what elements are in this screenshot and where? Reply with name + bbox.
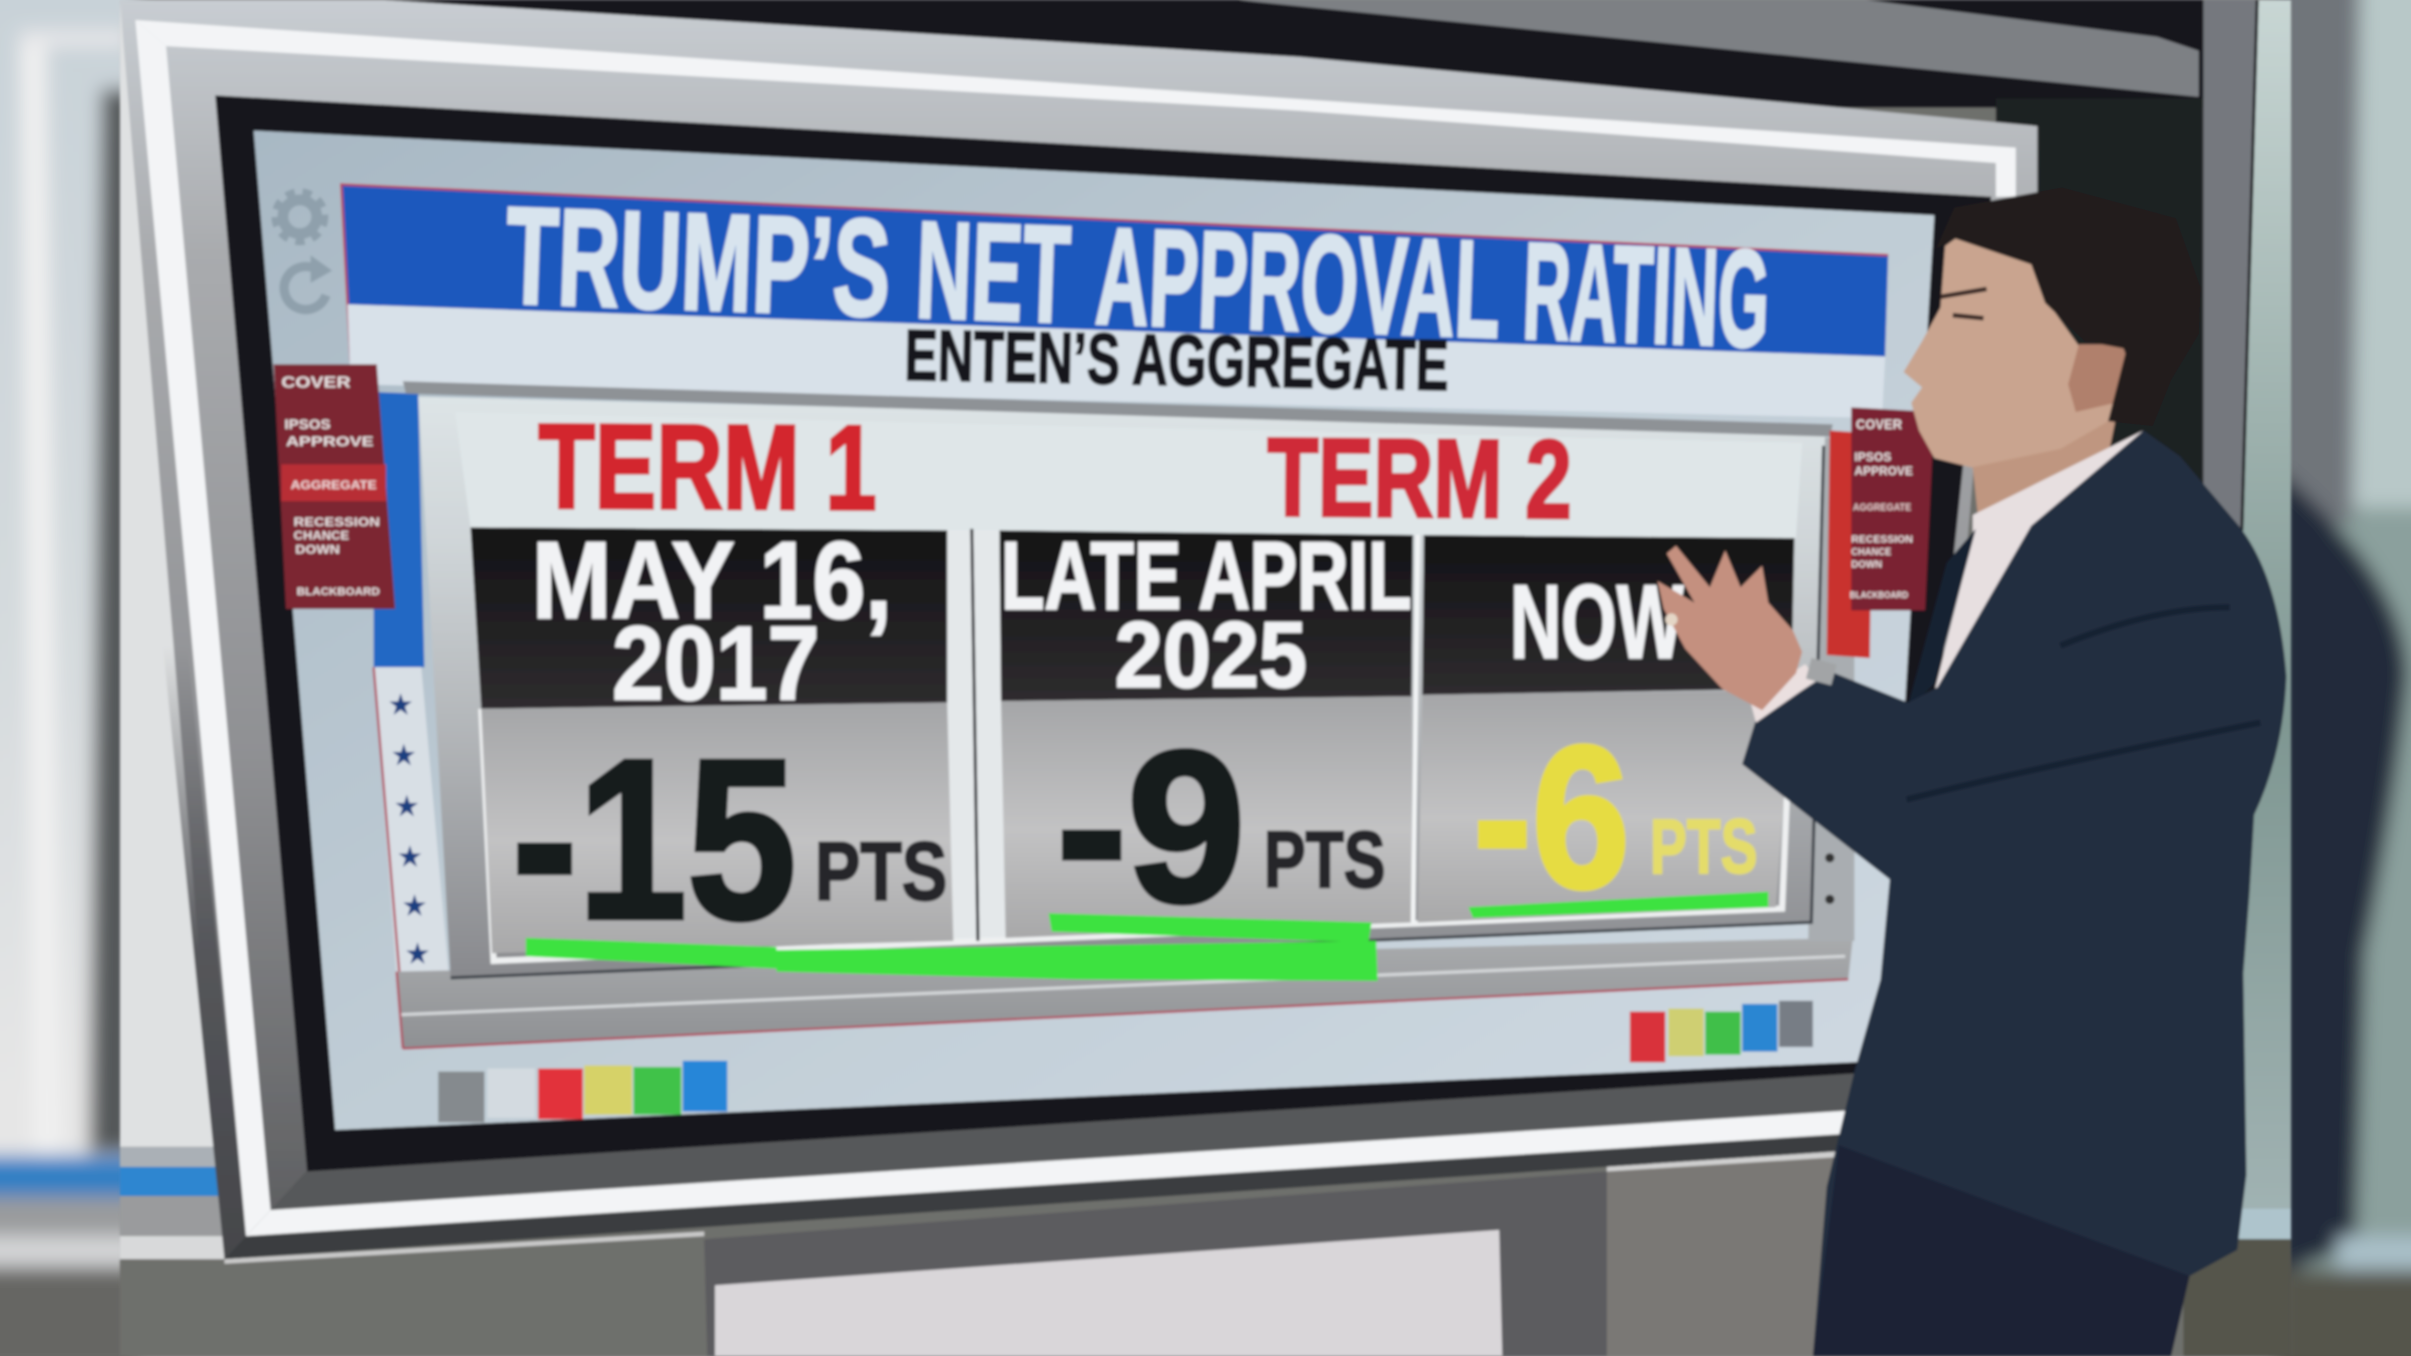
value -6 pts: PTS	[1650, 804, 1758, 890]
subtitle band	[348, 304, 1885, 418]
left blue stripe and stars: ★	[403, 891, 427, 921]
left navigation menu: BLACKBOARD	[297, 586, 380, 598]
right navigation menu: BLACKBOARD	[1850, 590, 1908, 600]
right navigation menu: AGGREGATE	[1853, 502, 1912, 513]
left blue stripe and stars: ★	[392, 740, 416, 770]
screen bezel	[120, 0, 2037, 1259]
green highlighter marks	[526, 892, 1768, 981]
left navigation menu: IPSOS	[284, 416, 331, 432]
right navigation menu: RECESSION	[1851, 535, 1913, 546]
title banner: RATING	[1521, 214, 1772, 377]
title banner	[341, 179, 1888, 377]
hair	[1936, 188, 2200, 426]
left navigation menu	[274, 364, 395, 609]
presenter	[1658, 188, 2286, 1356]
right navigation menu: APPROVE	[1854, 466, 1913, 478]
term 1 heading: TERM 1	[538, 399, 877, 535]
ear	[2068, 344, 2131, 412]
title: NET	[914, 193, 1073, 353]
color swatches left	[438, 1061, 727, 1122]
value -6 pts: -6	[1473, 704, 1630, 931]
value -9 pts: -9	[1056, 706, 1245, 947]
right navigation menu: IPSOS	[1854, 452, 1892, 464]
value -9 pts	[1056, 706, 1385, 947]
title	[503, 179, 1772, 377]
left blue stripe and stars: ★	[395, 791, 419, 821]
right navigation menu	[1827, 407, 1934, 658]
column: Now	[1418, 535, 1794, 931]
value -9 pts: PTS	[1264, 815, 1385, 904]
left navigation menu: CHANCE	[294, 531, 349, 543]
value -6 pts	[1473, 704, 1758, 931]
right navigation menu: CHANCE	[1851, 547, 1892, 558]
column: May 16, 2017	[471, 520, 953, 967]
left blue stripe and stars: ★	[389, 689, 413, 719]
value -15 pts: -15	[512, 713, 796, 967]
left blue stripe and stars: ★	[398, 842, 422, 872]
blurred right side band	[2276, 0, 2411, 1356]
left navigation menu: AGGREGATE	[291, 480, 377, 492]
left navigation menu: APPROVE	[286, 433, 374, 449]
column: Late April 2025	[999, 521, 1413, 947]
screen content	[254, 131, 1934, 1130]
hand	[1658, 546, 1802, 710]
subtitle: ENTEN’S AGGREGATE	[904, 316, 1450, 406]
value -15 pts: PTS	[815, 824, 947, 917]
column: May 16, 2017: 2017	[612, 606, 820, 723]
column: Late April 2025: 2025	[1115, 602, 1307, 707]
title: TRUMP’S	[503, 179, 893, 346]
left blue stripe and stars	[374, 392, 449, 978]
bottom tray	[397, 938, 1853, 1049]
watch	[1806, 658, 1837, 685]
left navigation menu: COVER	[281, 374, 351, 391]
shirt cuff	[1750, 664, 1817, 723]
white frame	[135, 20, 2016, 1236]
ring	[1665, 613, 1678, 626]
face	[1904, 238, 2119, 467]
suit jacket	[1742, 430, 2286, 1356]
column: Now: NOW	[1510, 564, 1684, 681]
icon: refresh arrow	[284, 255, 332, 310]
neck	[1971, 403, 2119, 526]
color swatches right	[1630, 1001, 1813, 1062]
eyebrow and eye	[1940, 289, 1987, 318]
left blue stripe and stars: ★	[406, 938, 430, 968]
trousers shade	[1813, 1145, 2190, 1356]
under jacket	[1907, 529, 1976, 710]
desk below the screen	[224, 1150, 1891, 1356]
left navigation menu: RECESSION	[294, 517, 380, 529]
column: May 16, 2017: MAY 16,	[532, 520, 892, 642]
right navigation menu: DOWN	[1851, 559, 1882, 570]
title: APPROVAL	[1093, 200, 1503, 368]
sleeve fold	[1907, 607, 2260, 799]
right navigation menu: COVER	[1856, 416, 1902, 432]
column: Late April 2025: LATE APRIL	[1001, 521, 1412, 630]
left navigation menu: DOWN	[295, 544, 340, 556]
column dividers	[972, 529, 1418, 941]
blurred left side band	[0, 0, 138, 1356]
shirt	[1934, 430, 2143, 692]
screen background	[254, 131, 1934, 1130]
results panel	[403, 381, 1854, 981]
icon: settings gear	[275, 192, 324, 241]
term 2 heading: TERM 2	[1267, 416, 1572, 542]
